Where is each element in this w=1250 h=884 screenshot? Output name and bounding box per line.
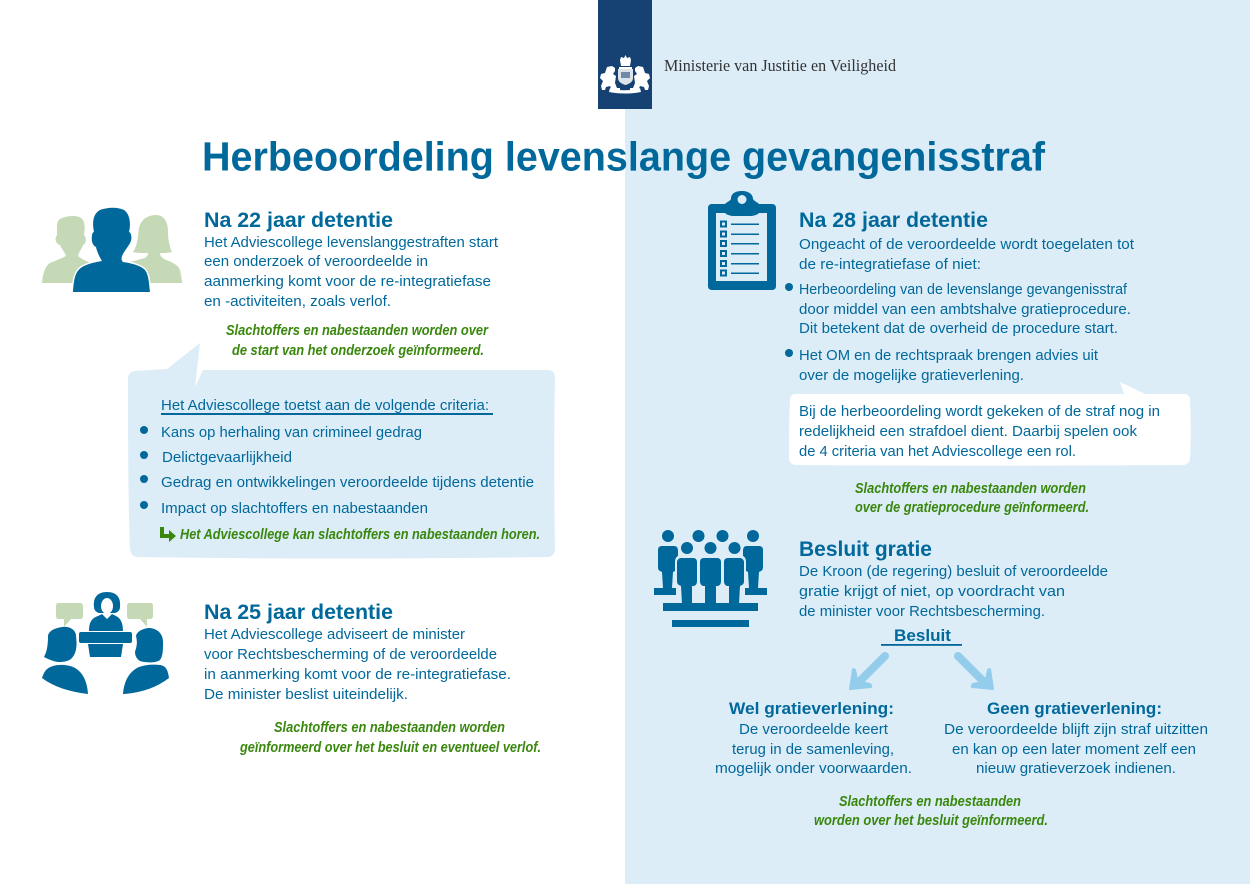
outcome: geen gratieverlening: De veroordeelde blijft zijn straf uitzitten [944, 721, 1208, 738]
outcome: wel gratieverlening: De veroordeelde keert [739, 721, 889, 738]
section: na 25 jaar detentie: in aanmerking komt voor de re-integratiefase. [204, 666, 511, 683]
section: na 28 jaar detentie: Herbeoordeling van de levenslange gevangenisstraf [799, 281, 1128, 298]
outcome: wel gratieverlening: terug in de samenleving, [732, 741, 894, 758]
icon: three people [42, 208, 182, 292]
panel: criteria speech bubble: Het Adviescollege kan slachtoffers en nabestaanden horen. [180, 527, 540, 543]
outcome: wel gratieverlening: Wel gratieverlening: [729, 699, 894, 718]
arrow: right to geen gratieverlening [958, 656, 993, 689]
section: na 22 jaar detentie [204, 209, 499, 310]
shield [618, 69, 633, 85]
panel: criteria speech bubble [128, 343, 555, 558]
section: na 22 jaar detentie: aanmerking komt voor de re-integratiefase [204, 273, 491, 290]
icon: group on steps [654, 530, 767, 627]
title: Herbeoordeling levenslange gevangenisstraf [202, 134, 1045, 180]
note: slachtoffers gratieprocedure: Slachtoffers en nabestaanden worden [855, 481, 1086, 497]
section: na 22 jaar detentie: Na 22 jaar detentie [204, 209, 393, 232]
outcome: wel gratieverlening [715, 699, 912, 777]
section: na 22 jaar detentie: en -activiteiten, zoals verlof. [204, 293, 391, 310]
section: na 28 jaar detentie [785, 209, 1135, 384]
section: na 22 jaar detentie: Het Adviescollege levenslanggestraften start [204, 234, 499, 251]
note: slachtoffers besluit verlof [239, 720, 541, 756]
panel: criteria speech bubble: Delictgevaarlijkheid [162, 449, 292, 466]
section: na 25 jaar detentie: voor Rechtsbescherming of de veroordeelde [204, 646, 497, 663]
section: na 28 jaar detentie: Ongeacht of de veroordeelde wordt toegelaten tot [799, 236, 1135, 253]
note: slachtoffers start onderzoek [226, 323, 489, 359]
note: slachtoffers besluit verlof: geïnformeerd over het besluit en eventueel verlof. [239, 740, 541, 756]
section: besluit gratie: de minister voor Rechtsbescherming. [799, 603, 1045, 620]
panel: white speech bubble [789, 382, 1191, 466]
icon: hearing at table [42, 592, 169, 694]
heading: besluit [881, 626, 962, 646]
section: besluit gratie: Besluit gratie [799, 538, 932, 561]
section: na 28 jaar detentie: over de mogelijke gratieverlening. [799, 367, 1024, 384]
note: slachtoffers start onderzoek: de start van het onderzoek geïnformeerd. [232, 343, 484, 359]
panel: criteria speech bubble: Kans op herhaling van crimineel gedrag [161, 424, 422, 441]
arrow: left to wel gratieverlening [850, 656, 885, 689]
outcome: geen gratieverlening: en kan op een later moment zelf een [952, 741, 1196, 758]
section: na 28 jaar detentie: Het OM en de rechtspraak brengen advies uit [799, 347, 1099, 364]
section: na 28 jaar detentie: door middel van een ambtshalve gratieprocedure. [799, 301, 1131, 318]
left lion [600, 66, 620, 91]
section: na 25 jaar detentie [204, 601, 511, 703]
panel: white speech bubble: redelijkheid een strafdoel dient. Daarbij spelen ook [799, 423, 1137, 440]
section: na 25 jaar detentie: De minister beslist uiteindelijk. [204, 686, 408, 703]
panel: white speech bubble: Bij de herbeoordeling wordt gekeken of de straf nog in [799, 403, 1160, 420]
ribbon [609, 88, 641, 94]
panel: criteria speech bubble: Het Adviescollege toetst aan de volgende criteria: [161, 397, 489, 414]
section: besluit gratie: gratie krijgt of niet, op voordracht van [799, 583, 1065, 600]
panel: criteria speech bubble: Impact op slachtoffers en nabestaanden [161, 500, 428, 517]
section: na 28 jaar detentie: Na 28 jaar detentie [799, 209, 988, 232]
note: slachtoffers besluit [814, 794, 1048, 829]
outcome: wel gratieverlening: mogelijk onder voorwaarden. [715, 760, 912, 777]
note: slachtoffers gratieprocedure [855, 481, 1089, 516]
right lion [630, 66, 650, 91]
section: besluit gratie: De Kroon (de regering) besluit of veroordeelde [799, 563, 1108, 580]
outcome: geen gratieverlening: nieuw gratieverzoek indienen. [976, 760, 1176, 777]
note: slachtoffers start onderzoek: Slachtoffers en nabestaanden worden over [226, 323, 489, 339]
panel: criteria speech bubble: Gedrag en ontwikkelingen veroordeelde tijdens detentie [161, 474, 534, 491]
right panel background [625, 0, 1250, 884]
section: na 22 jaar detentie: een onderzoek of veroordeelde in [204, 253, 428, 270]
section: na 28 jaar detentie: Dit betekent dat de overheid de procedure start. [799, 320, 1118, 337]
note: slachtoffers besluit verlof: Slachtoffers en nabestaanden worden [274, 720, 505, 736]
icon: clipboard [708, 191, 776, 290]
section: na 25 jaar detentie: Het Adviescollege adviseert de minister [204, 626, 465, 643]
crown [620, 55, 631, 66]
ministry name: Ministerie van Justitie en Veiligheid [664, 56, 897, 75]
outcome: geen gratieverlening [944, 699, 1208, 777]
section: na 25 jaar detentie: Na 25 jaar detentie [204, 601, 393, 624]
section: na 28 jaar detentie: de re-integratiefase of niet: [799, 256, 981, 273]
note: slachtoffers besluit: worden over het besluit geïnformeerd. [814, 813, 1048, 829]
section: besluit gratie [799, 538, 1108, 620]
heading: besluit: Besluit [894, 626, 951, 645]
note: slachtoffers gratieprocedure: over de gratieprocedure geïnformeerd. [855, 500, 1089, 516]
panel: white speech bubble: de 4 criteria van het Adviescollege een rol. [799, 443, 1076, 460]
outcome: geen gratieverlening: Geen gratieverlening: [987, 699, 1162, 718]
note: slachtoffers besluit: Slachtoffers en nabestaanden [839, 794, 1021, 810]
logo: Rijksoverheid [598, 0, 652, 109]
